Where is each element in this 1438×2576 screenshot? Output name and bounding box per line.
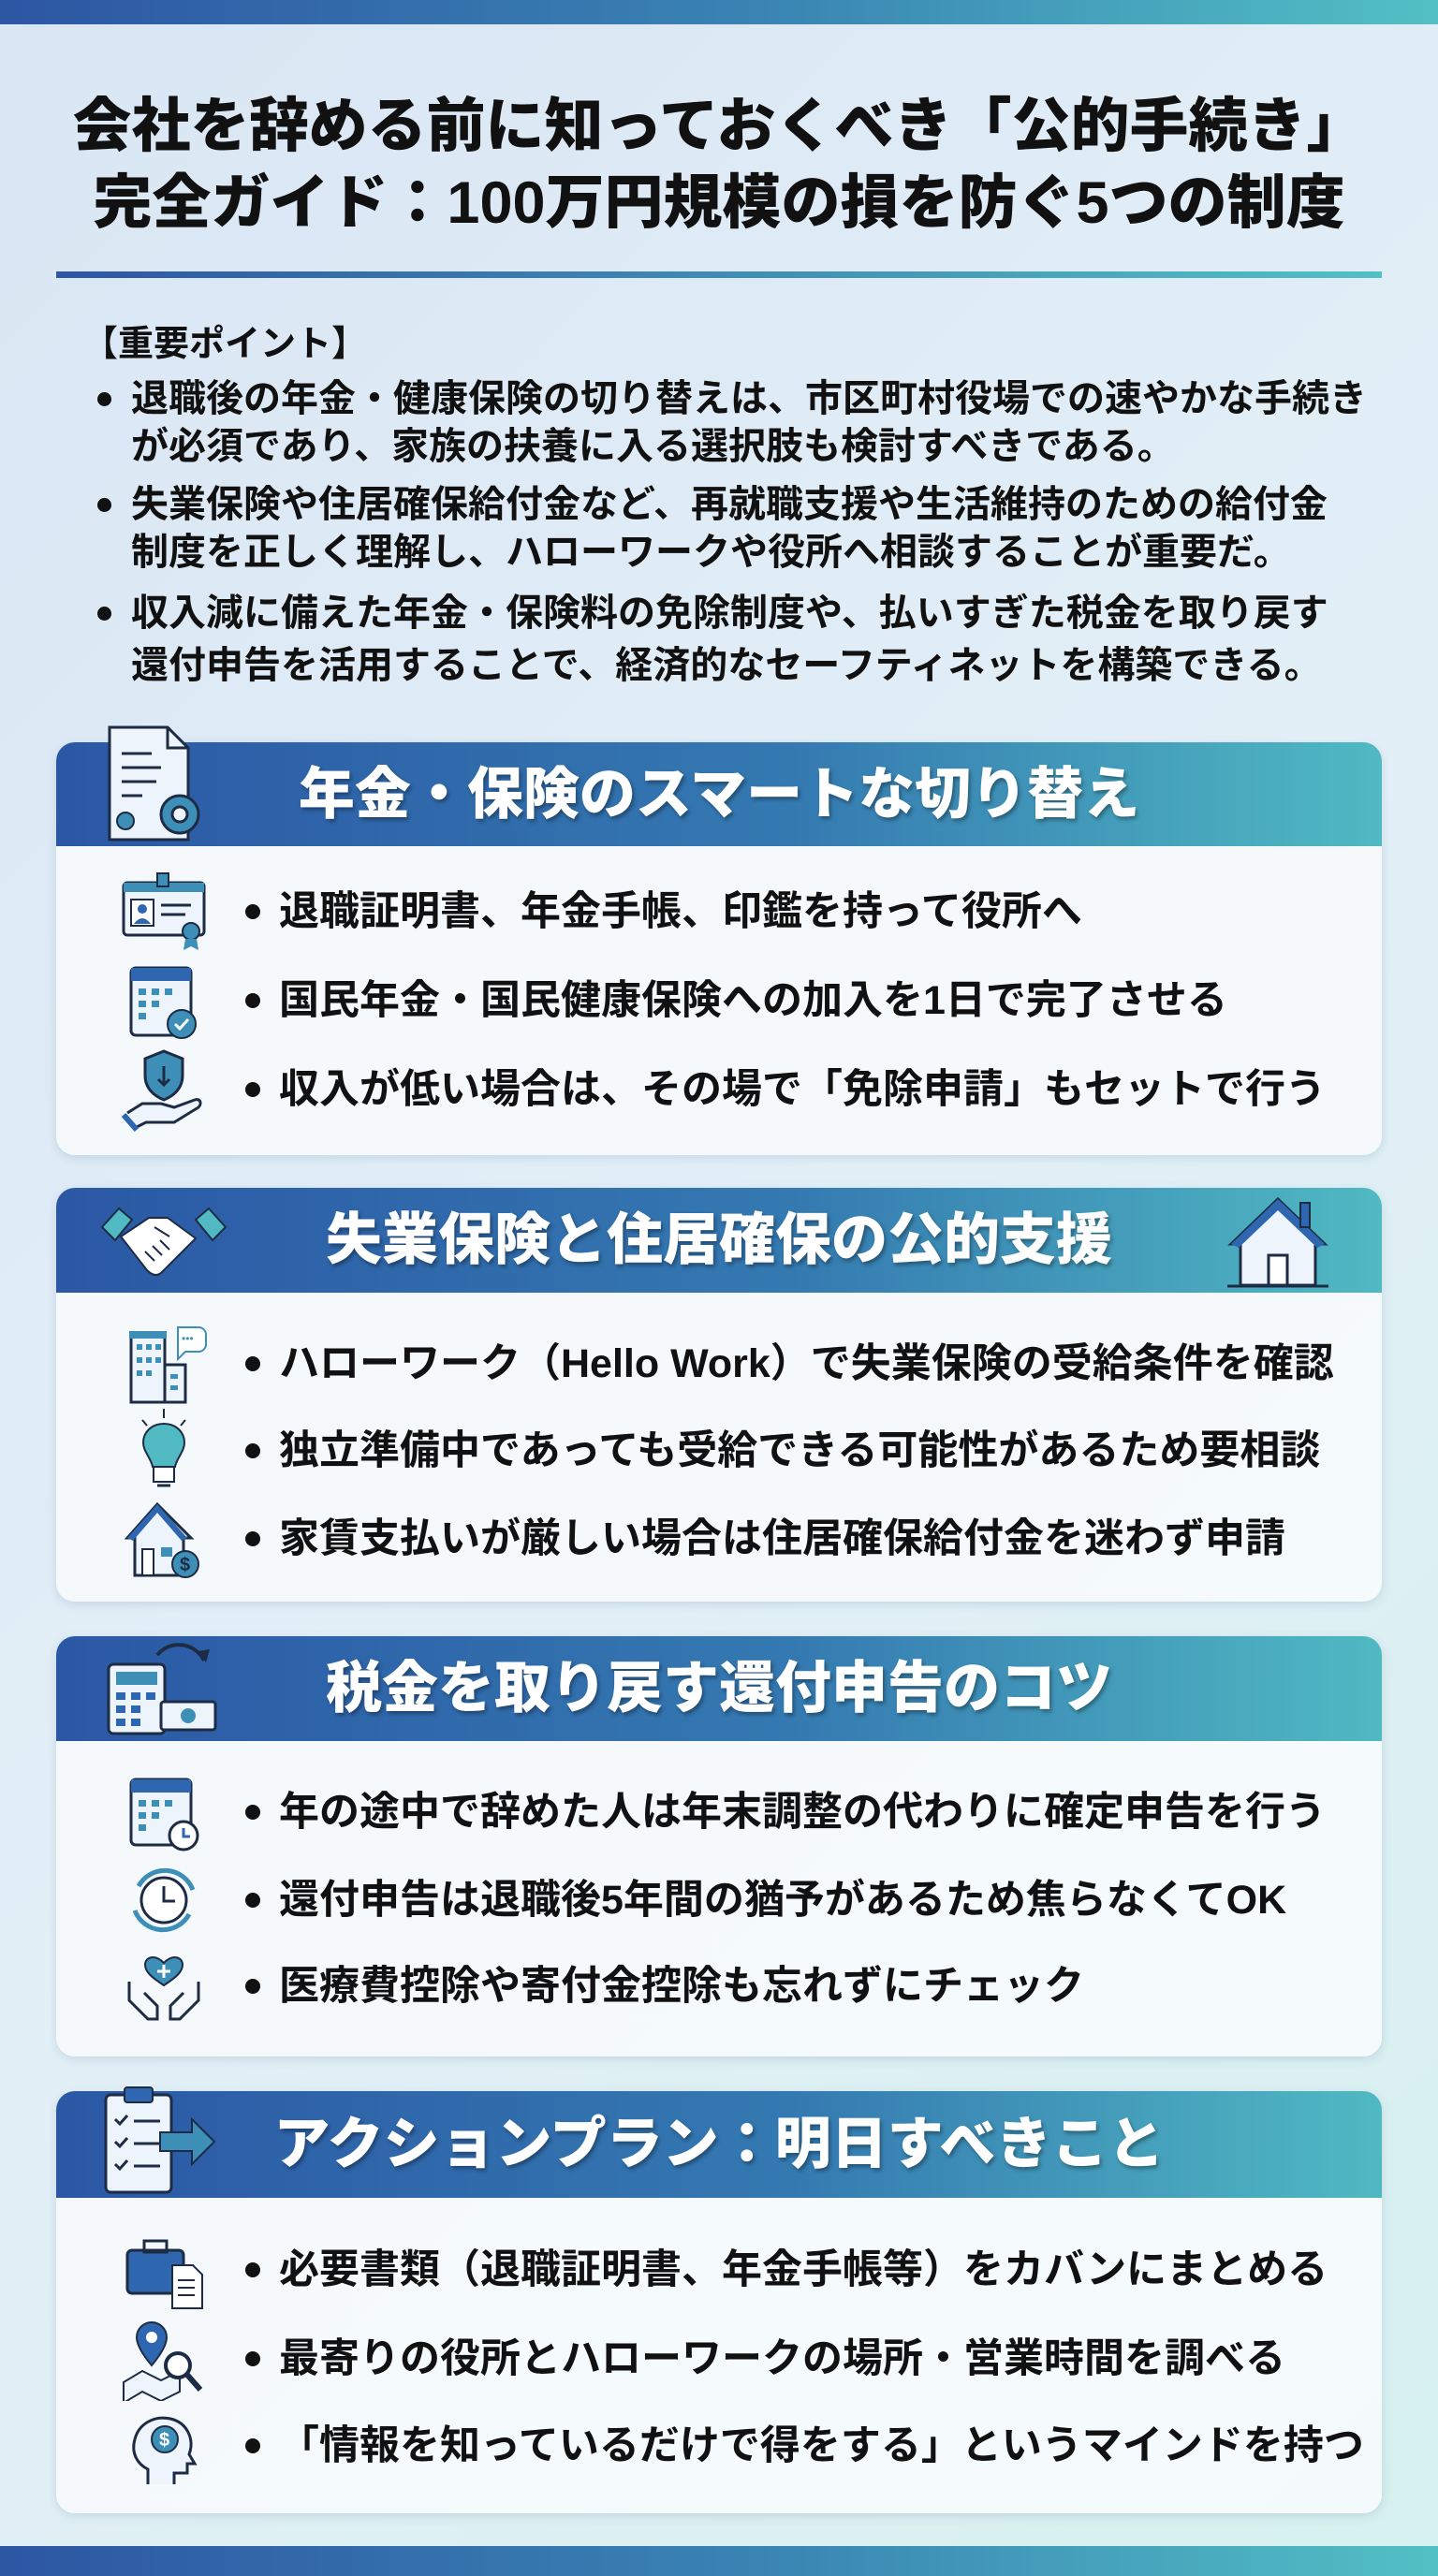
key point 2: 失業保険や住居確保給付金など、再就職支援や生活維持のための給付金 [131,484,1328,525]
icon: clock arrows [133,1868,195,1932]
icon: light bulb [141,1409,186,1486]
icon: head dollar [132,2417,198,2484]
item 2 [123,2321,1285,2401]
key point 1: 退職後の年金・健康保険の切り替えは、市区町村役場での速やかな手続き [131,378,1367,419]
item 2 [133,1868,1286,1932]
item 1 [129,1326,1334,1404]
icon: map search [123,2321,202,2401]
icon: head dollar: $ [159,2430,169,2451]
item 1: 年の途中で辞めた人は年末調整の代わりに確定申告を行う [279,1790,1326,1835]
icon: calculator money [107,1643,217,1735]
item 2: 最寄りの役所とハローワークの場所・営業時間を調べる [279,2336,1285,2381]
panel: unemployment & housing [56,1188,1382,1602]
item 2 [141,1409,1320,1486]
icon: briefcase document [125,2239,203,2309]
icon: calendar clock [129,1778,198,1852]
item 3 [132,2417,1364,2484]
item 2: 還付申告は退職後5年間の猶予があるため焦らなくてOK [279,1878,1286,1923]
key point 3: 収入減に備えた年金・保険料の免除制度や、払いすぎた税金を取り戻す [131,593,1328,634]
panel: pension & insurance [56,742,1382,1155]
header title: 年金・保険のスマートな切り替え [299,763,1139,826]
header band [56,1188,1382,1293]
title: 完全ガイド：100万円規模の損を防ぐ5つの制度 [93,170,1345,236]
item 2: 独立準備中であっても受給できる可能性があるため要相談 [279,1428,1320,1473]
item 3: 収入が低い場合は、その場で「免除申請」もセットで行う [279,1067,1326,1112]
icon: house with coin [124,1501,199,1578]
icon: office building [129,1326,207,1404]
icon: house [1227,1197,1328,1288]
icon: calendar check [129,966,197,1039]
icon: house with coin: $ [180,1555,190,1575]
item 3 [122,1049,1326,1132]
bullet text [245,904,260,919]
key point 3: 還付申告を活用することで、経済的なセーフティネットを構築できる。 [131,645,1322,686]
item 1: 必要書類（退職証明書、年金手帳等）をカバンにまとめる [279,2247,1328,2292]
key point 2: 制度を正しく理解し、ハローワークや役所へ相談することが重要だ。 [131,532,1291,573]
divider [56,271,1382,278]
icon: clipboard arrow [105,2086,215,2194]
header band [56,2091,1382,2198]
item 1 [122,872,1082,950]
item 3: 家賃支払いが厳しい場合は住居確保給付金を迷わず申請 [279,1516,1285,1561]
header band [56,1636,1382,1741]
title: 会社を辞める前に知っておくべき「公的手続き」 [73,94,1365,159]
item 2: 国民年金・国民健康保険への加入を1日で完了させる [279,978,1227,1023]
icon: hands heart [127,1956,200,2020]
item 3: 医療費控除や寄付金控除も忘れずにチェック [279,1964,1084,2009]
header title: 失業保険と住居確保の公的支援 [326,1208,1112,1271]
title [73,94,1365,236]
item 3 [124,1501,1285,1578]
item 3: 「情報を知っているだけで得をする」というマインドを持つ [279,2423,1364,2468]
bottom bar [0,2546,1438,2576]
key points [82,324,1367,686]
item 1 [129,1778,1326,1852]
icon: office building: ••• [182,1332,194,1345]
panel: tax refund [56,1636,1382,2056]
header band [56,742,1382,846]
item 1: 退職証明書、年金手帳、印鑑を持って役所へ [279,889,1082,934]
key points heading: 【重要ポイント】 [82,325,367,364]
key point 1: が必須であり、家族の扶養に入る選択肢も検討すべきである。 [131,426,1175,467]
key point 1 [97,378,1367,467]
item 1: ハローワーク（Hello Work）で失業保険の受給条件を確認 [279,1341,1334,1386]
icon: handshake [101,1208,227,1277]
icon: id card [122,872,206,950]
icon: hand shield [122,1049,202,1132]
header title: 税金を取り戻す還付申告のコツ [326,1657,1112,1720]
key point 3 [97,593,1328,686]
item 3 [127,1956,1084,2020]
key point 2 [97,484,1328,573]
header title: アクションプラン：明日すべきこと [273,2113,1165,2175]
top bar [0,0,1438,24]
icon: document gear [109,726,200,841]
panel: action plan [56,2091,1382,2513]
item 2 [129,966,1227,1039]
item 1 [125,2239,1328,2309]
